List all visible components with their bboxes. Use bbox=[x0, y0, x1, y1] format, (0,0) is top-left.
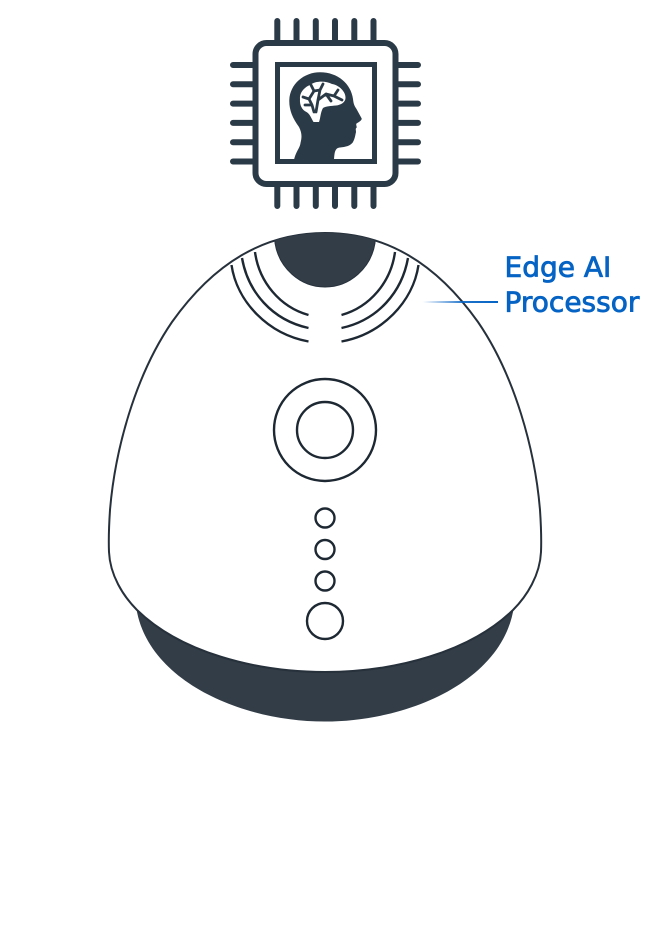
sound wave arcs bbox=[232, 252, 418, 342]
chip pins bbox=[233, 21, 418, 206]
icon: head silhouette bbox=[289, 72, 362, 160]
icon: AI chip with brain bbox=[233, 21, 418, 206]
main illustration bbox=[108, 18, 640, 722]
central camera ring bbox=[274, 379, 376, 481]
icon: brain bbox=[300, 82, 346, 122]
chip inner frame bbox=[278, 64, 374, 162]
callout label: Edge AI bbox=[504, 250, 611, 284]
callout label: Processor bbox=[504, 286, 640, 318]
device body bbox=[109, 233, 541, 672]
device top sensor cap bbox=[275, 230, 375, 287]
indicator buttons bbox=[307, 508, 343, 639]
callout leader line bbox=[423, 301, 498, 303]
chip outer frame bbox=[256, 43, 396, 184]
device base bbox=[136, 606, 514, 722]
